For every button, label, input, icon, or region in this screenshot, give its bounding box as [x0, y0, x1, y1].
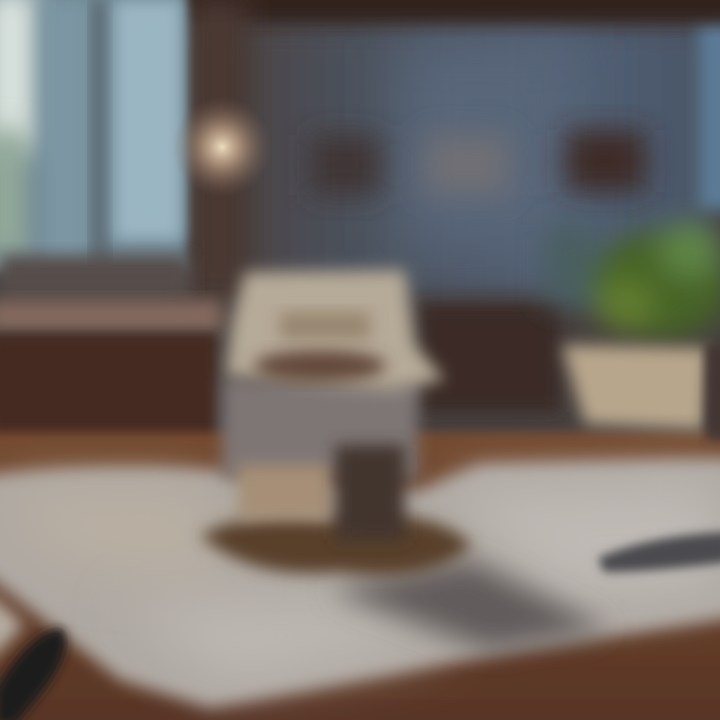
cream object bottom left [0, 590, 24, 665]
right cabinet [420, 304, 560, 412]
object dark lower section [335, 445, 405, 540]
object base spill [200, 515, 472, 575]
dark edge at right of pot [706, 345, 720, 440]
object white top [225, 270, 445, 390]
brown column beside the window [188, 0, 248, 300]
window sill [0, 300, 222, 332]
object inner top [280, 312, 370, 340]
wood table [0, 432, 720, 720]
left cabinet [0, 334, 216, 446]
central object [200, 270, 472, 575]
window with curtains [0, 0, 190, 299]
plant [545, 222, 720, 339]
plant pot [562, 345, 708, 430]
picture frames [310, 130, 646, 195]
dark object bottom left [0, 628, 66, 720]
white paper sheet [0, 458, 720, 708]
wall lamp glow [172, 97, 272, 197]
object brown band [254, 350, 386, 382]
pen on paper [598, 532, 720, 572]
ceiling beam [170, 0, 720, 22]
object lower body [222, 380, 418, 480]
shadow on paper [330, 560, 610, 650]
object tan lower section [238, 465, 333, 520]
